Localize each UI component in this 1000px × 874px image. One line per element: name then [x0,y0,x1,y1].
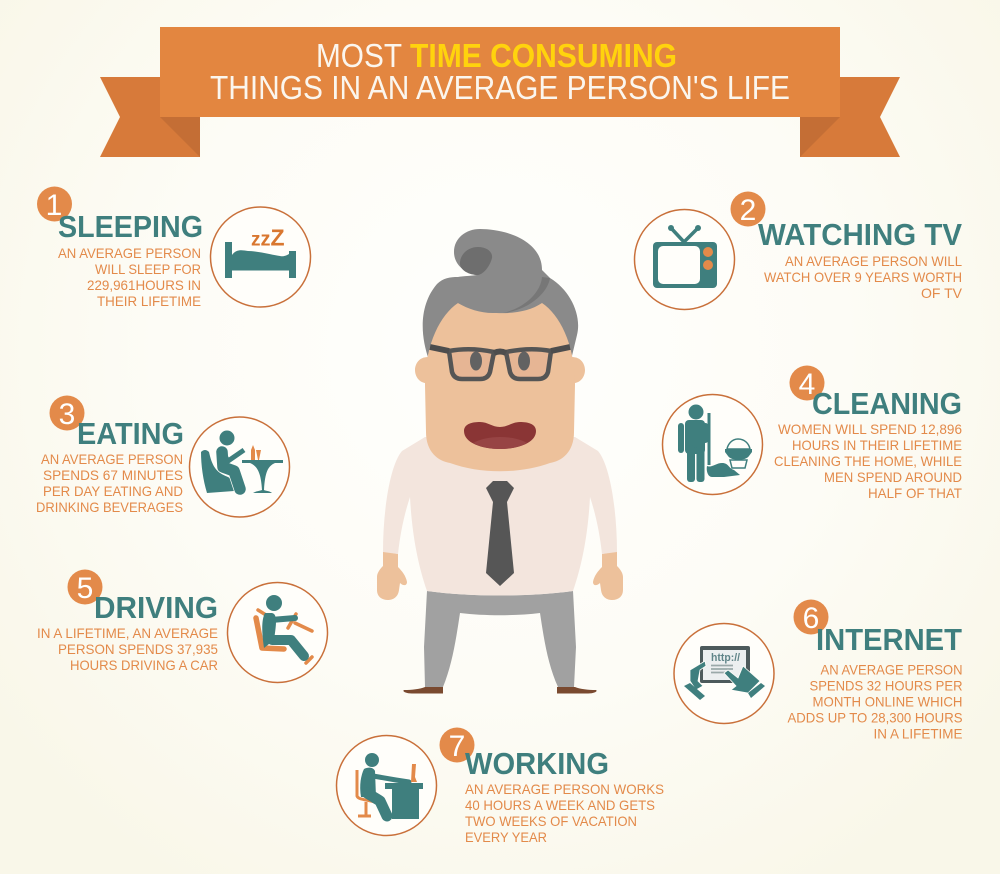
number badge 4 [790,366,824,401]
text driving: PERSON SPENDS 37,935 [58,641,218,657]
text watching tv: AN AVERAGE PERSON WILL [785,253,962,269]
text eating: SPENDS 67 MINUTES [43,467,183,483]
text internet: ADDS UP TO 28,300 HOURS [788,710,962,726]
title text [210,37,790,106]
icon: person driving [228,582,328,682]
icon: person at desk [336,736,436,836]
text eating: PER DAY EATING AND [43,483,183,499]
number badge 2: 2 [740,194,756,227]
title text: THINGS IN AN AVERAGE PERSON'S LIFE [210,69,790,106]
text internet [788,662,962,742]
central character [377,229,623,694]
icon: person with mop and bucket [662,394,762,494]
text cleaning: MEN SPEND AROUND [824,469,962,485]
number badge 2 [730,192,766,227]
heading driving: DRIVING [94,590,218,625]
number badge 7: 7 [449,730,465,763]
character tie [486,481,514,586]
icon: television [634,210,734,310]
text sleeping: 229,961HOURS IN [87,277,201,293]
text watching tv: WATCH OVER 9 YEARS WORTH [764,269,962,285]
heading internet: INTERNET [816,622,962,657]
character hands [377,551,623,600]
text cleaning: HOURS IN THEIR LIFETIME [792,437,962,453]
number badge 4: 4 [799,368,815,401]
number badge 6 [794,600,828,635]
number badge 7 [440,728,474,763]
title text: MOST [316,37,402,74]
character hair shadow [503,277,550,313]
text working: 40 HOURS A WEEK AND GETS [465,797,655,813]
icon: hands on tablet: http:// [711,652,740,664]
heading sleeping: SLEEPING [58,209,203,244]
section 5: driving [37,570,328,682]
text watching tv [764,253,963,301]
title ribbon [100,27,900,157]
text sleeping: AN AVERAGE PERSON [58,245,201,261]
text watching tv: OF TV [921,285,963,301]
section 6: internet [674,600,962,742]
icon: bed [210,207,310,307]
icon: bed: zzZ [251,224,285,250]
character glasses [430,347,570,379]
section 4: cleaning [662,366,962,501]
text working: TWO WEEKS OF VACATION [465,813,637,829]
text internet: SPENDS 32 HOURS PER [810,678,962,694]
icon: hands on tablet [674,624,774,724]
heading working: WORKING [465,746,609,781]
character legs [424,591,576,687]
character shoes [403,687,597,694]
icon: person eating at table [190,417,290,517]
character ears [415,357,585,383]
character hair bun [454,229,542,313]
number badge 5: 5 [77,572,93,605]
character face [425,303,575,471]
text eating [36,451,183,515]
character shirt [383,437,617,596]
number badge 6: 6 [803,602,819,635]
text sleeping: WILL SLEEP FOR [95,261,201,277]
text eating: DRINKING BEVERAGES [36,499,183,515]
section 7: working [336,728,664,845]
section 1: sleeping [37,186,310,309]
text sleeping [58,245,201,309]
text driving: IN A LIFETIME, AN AVERAGE [37,625,218,641]
heading eating: EATING [77,416,184,451]
number badge 1: 1 [46,189,62,222]
text driving [37,625,218,673]
section 3: eating [36,396,290,517]
text eating: AN AVERAGE PERSON [41,451,183,467]
text sleeping: THEIR LIFETIME [97,293,201,309]
character mouth [464,422,536,449]
heading cleaning: CLEANING [812,386,962,421]
text cleaning [774,421,962,501]
section 2: watching tv [634,192,963,310]
text working: AN AVERAGE PERSON WORKS [465,781,664,797]
number badge 3: 3 [59,398,75,431]
text cleaning: WOMEN WILL SPEND 12,896 [778,421,962,437]
text cleaning: CLEANING THE HOME, WHILE [774,453,962,469]
text working [465,781,664,845]
text internet: IN A LIFETIME [874,726,962,742]
character hair back [423,270,578,360]
text internet: MONTH ONLINE WHICH [812,694,962,710]
character hair curl [460,247,492,275]
title text: TIME CONSUMING [410,37,677,74]
text internet: AN AVERAGE PERSON [820,662,962,678]
text working: EVERY YEAR [465,829,547,845]
number badge 5 [68,570,102,605]
number badge 3 [50,396,84,431]
text cleaning: HALF OF THAT [868,485,962,501]
text driving: HOURS DRIVING A CAR [70,657,218,673]
number badge 1 [37,186,72,222]
heading watching tv: WATCHING TV [758,217,962,252]
